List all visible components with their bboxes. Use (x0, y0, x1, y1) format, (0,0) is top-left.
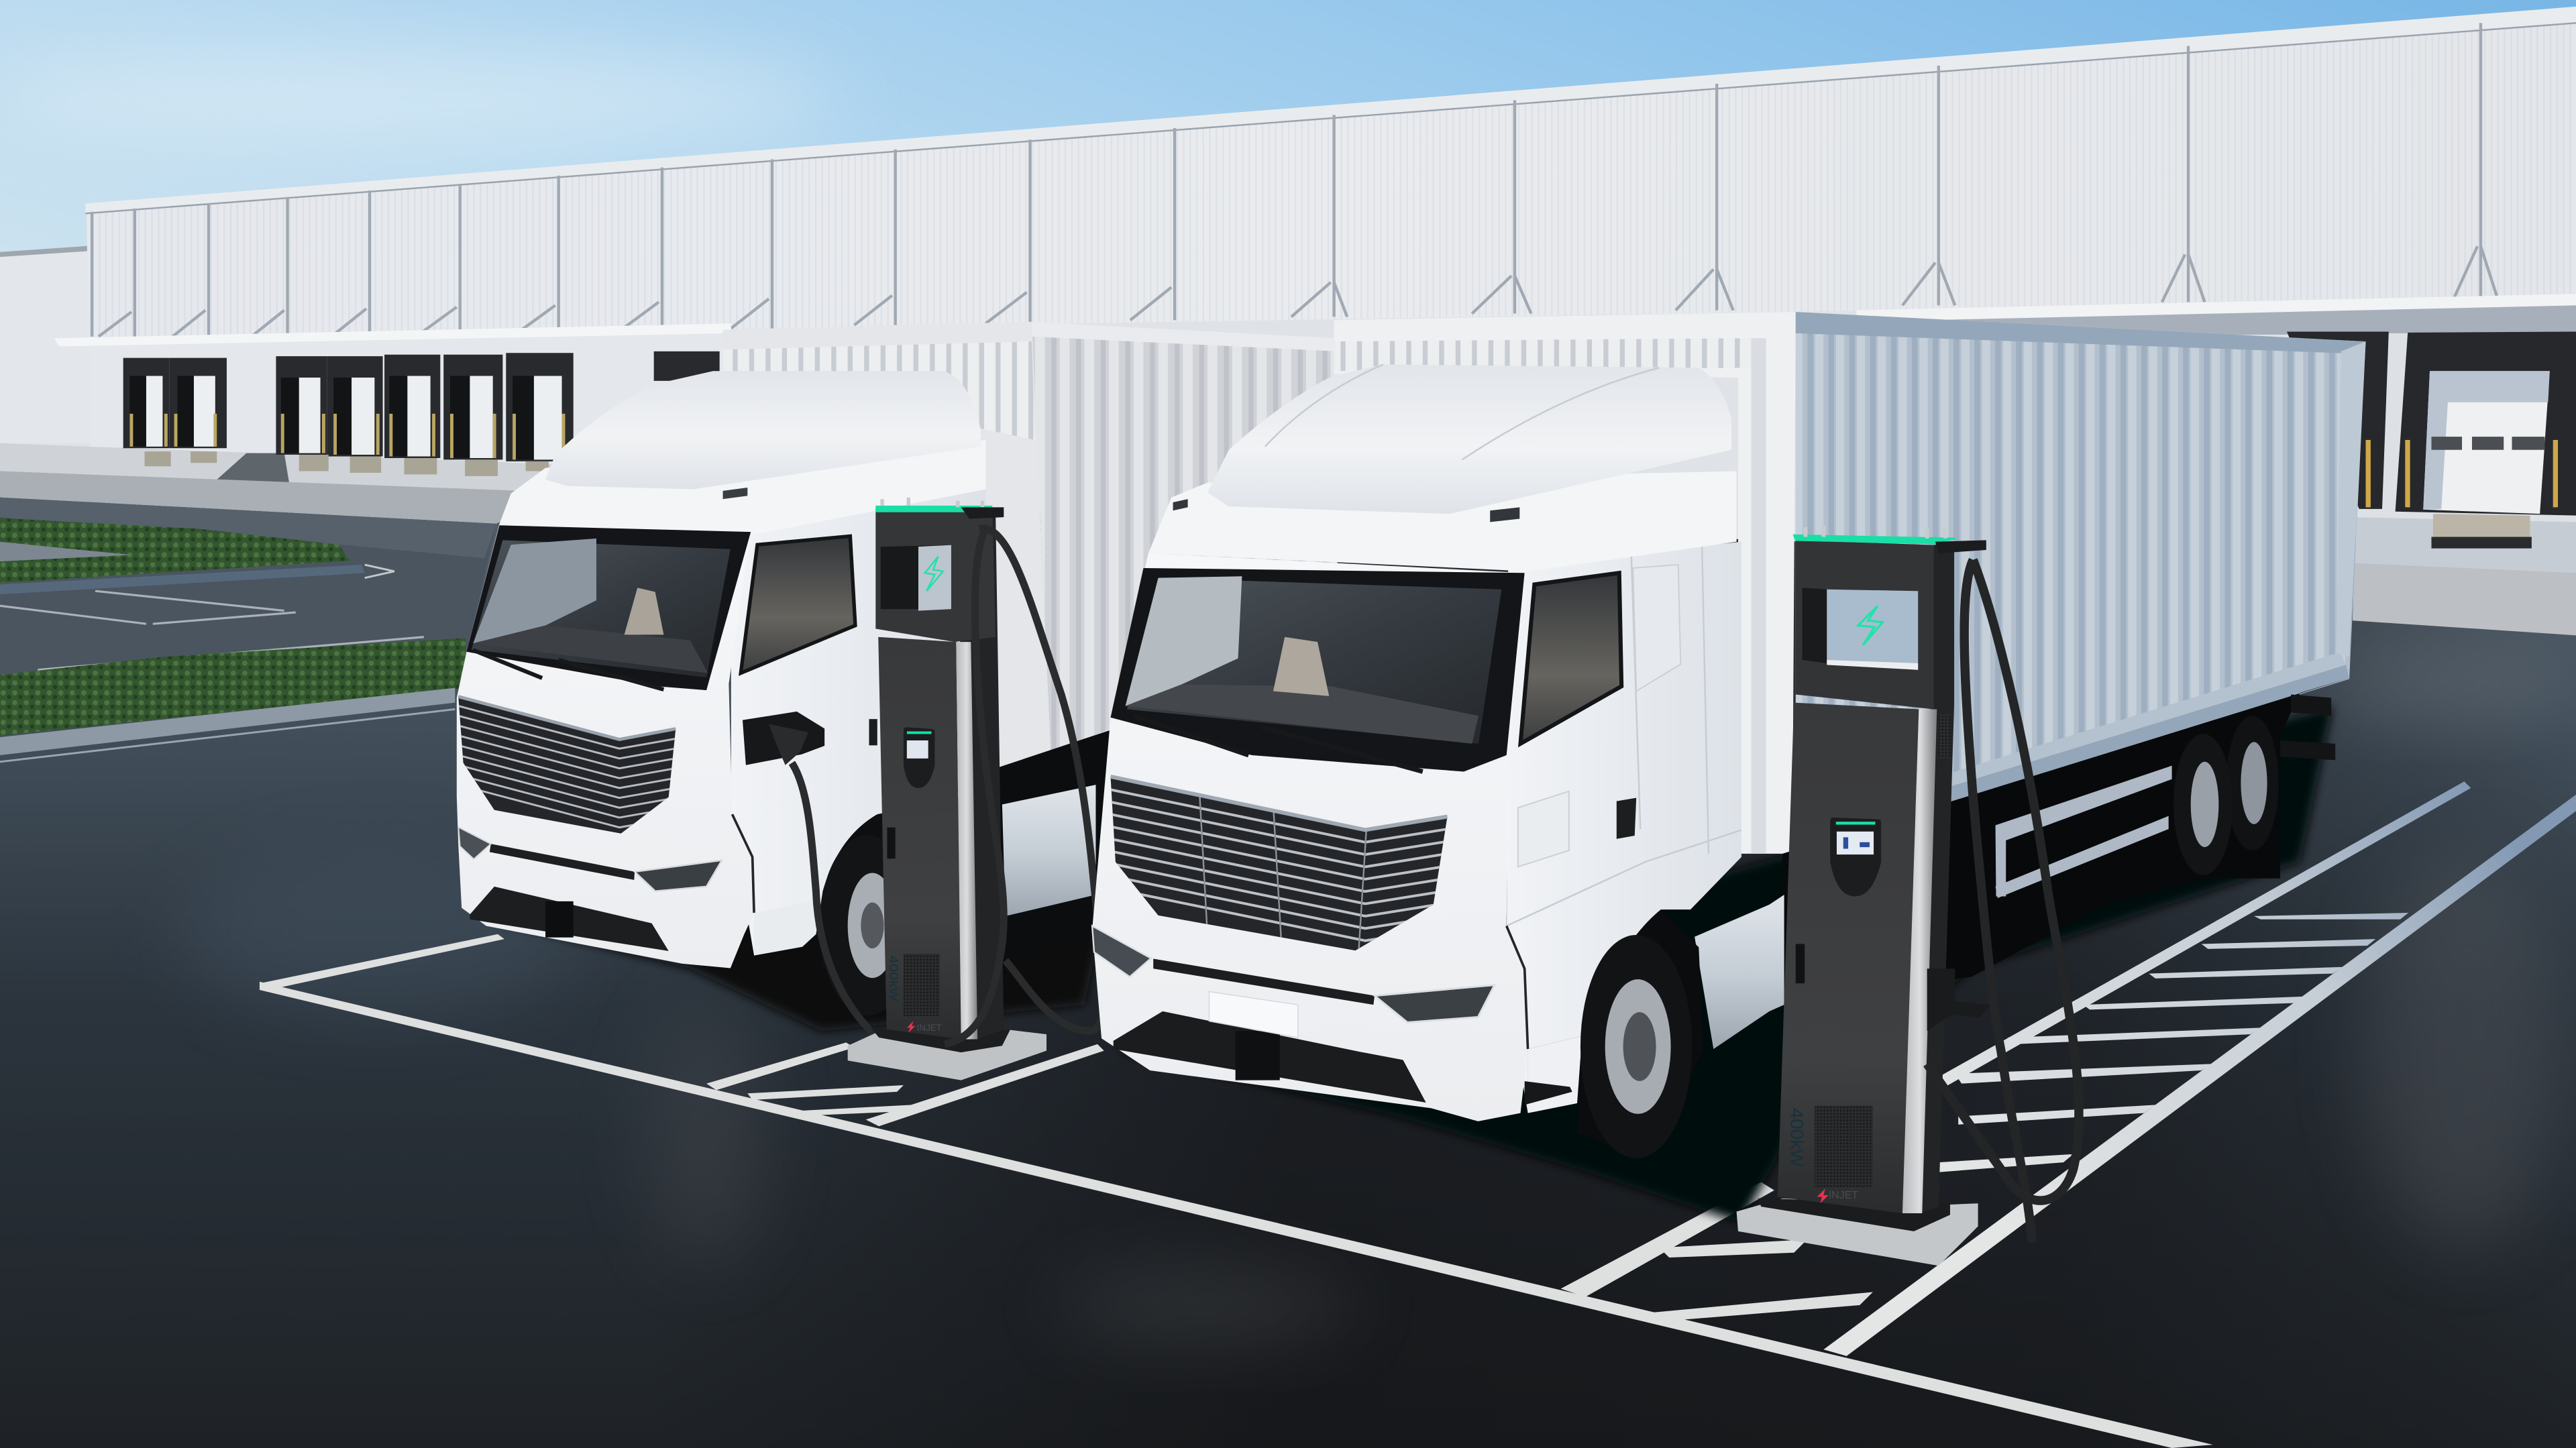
left end block (0, 246, 105, 443)
loading dock right (2287, 331, 2576, 549)
steel strip (956, 642, 977, 1039)
see-through window (881, 545, 951, 611)
plinth left (0, 443, 567, 492)
chassis (1782, 678, 2349, 1001)
wall backing (0, 299, 2576, 571)
body crease (733, 814, 754, 913)
door handle (1796, 944, 1805, 983)
brand logo: INJET (917, 1023, 942, 1033)
canopy right (1856, 294, 2576, 322)
stair wedge (215, 453, 289, 483)
power label: 400kW (887, 956, 901, 1002)
cab side (1507, 542, 1741, 1113)
cab front (1093, 553, 1528, 1121)
roof cap (1148, 471, 1737, 571)
trailer left: front face (723, 322, 1051, 791)
brand logo (907, 1021, 942, 1033)
side skirt (754, 899, 820, 956)
inner cable (945, 528, 1004, 1044)
rear bars (2280, 694, 2335, 760)
cable holder (1935, 540, 1986, 553)
lower wall right (2349, 333, 2576, 573)
hedge front (0, 638, 466, 762)
wheel arch (1577, 909, 1704, 1158)
fuel tank (1002, 785, 1095, 916)
truck right (1092, 312, 2366, 1158)
concrete base (1737, 1199, 1978, 1266)
green top light (875, 506, 992, 512)
head (1796, 540, 1933, 709)
side window (1521, 573, 1621, 744)
roof fairing (1208, 364, 1731, 514)
bumper intake (1114, 1011, 1426, 1103)
base plate (871, 1027, 1010, 1052)
brand logo (1817, 1188, 1858, 1203)
asphalt ground (0, 468, 2576, 1448)
steel strip (1902, 709, 1937, 1213)
back parking lot (0, 498, 496, 679)
roof fairing (545, 371, 981, 489)
rear wheels (2174, 716, 2279, 875)
trailer left: side (1032, 322, 1337, 767)
roof cap (499, 440, 985, 535)
charging connector on truck (743, 712, 824, 765)
side guard (1996, 766, 2172, 898)
cabinet front (1778, 703, 1919, 1213)
door handle (869, 719, 877, 745)
lower wall left (91, 329, 731, 483)
windshield (1111, 568, 1525, 771)
roof crease lines (1265, 364, 1659, 459)
parking lines (260, 781, 2576, 1448)
charger right (1737, 525, 2079, 1266)
dark band (1153, 959, 1375, 1005)
power label: 400kW (1787, 1108, 1807, 1167)
door handle (887, 828, 896, 858)
truck shadows on wet asphalt (493, 706, 2333, 1223)
outer cable (1927, 560, 2079, 1201)
trailer right: side (1796, 312, 2366, 850)
green top light (1794, 535, 1955, 543)
cab step (1525, 1081, 1572, 1105)
headlight (635, 860, 722, 891)
walkway left (0, 471, 567, 524)
chassis dark (985, 706, 1183, 968)
side (1921, 542, 1954, 1213)
bumper intake (470, 887, 669, 951)
upper wall with panels (85, 7, 2576, 340)
outer cable (979, 528, 1104, 1031)
cab front (457, 524, 754, 968)
front wheel (1580, 935, 1692, 1158)
fog light (458, 827, 491, 859)
wheel arch (821, 814, 920, 985)
side vent (1939, 714, 1950, 759)
cable holder (961, 507, 1004, 519)
front wheel (820, 835, 915, 1015)
HMI panel (904, 727, 934, 788)
corrugated band right (1856, 305, 2576, 337)
vent (1815, 1106, 1873, 1187)
loading docks left (123, 351, 720, 476)
see-through window (1803, 588, 1918, 670)
dark band (490, 844, 635, 880)
fog light (1092, 926, 1151, 977)
plate panel (1209, 991, 1298, 1038)
cable from truck (792, 763, 985, 1054)
fuel tank (1695, 895, 1784, 1049)
sky (0, 0, 2576, 525)
walkway right (2353, 563, 2576, 635)
inner cable (1964, 560, 2032, 1243)
windshield (467, 525, 751, 690)
holster (1927, 968, 1991, 1031)
vent (904, 954, 940, 1016)
roof sensors (1173, 499, 1519, 522)
trailer right: front face (1334, 312, 1796, 854)
headlight (1375, 985, 1495, 1023)
warehouse building (0, 7, 2576, 573)
side skirt (1528, 1036, 1582, 1113)
HMI panel (1830, 818, 1881, 897)
charger left (848, 498, 1104, 1080)
concrete base (848, 1027, 1046, 1080)
grille (458, 697, 676, 834)
truck left (457, 322, 1337, 1054)
lifting eyes (1805, 525, 1945, 539)
lifting eyes (882, 498, 982, 507)
door details (1507, 547, 1741, 926)
grille (1111, 777, 1448, 952)
body crease (1507, 926, 1528, 1049)
side (955, 512, 1004, 1039)
hedge back (0, 518, 394, 594)
head (875, 509, 996, 642)
cab side (731, 489, 985, 956)
base plate (1758, 1199, 1950, 1231)
cabinet front (878, 637, 961, 1039)
plinth right (2349, 517, 2576, 573)
brand logo: INJET (1829, 1190, 1858, 1201)
side window (741, 536, 855, 673)
canopy left (54, 323, 731, 346)
roof sensor (723, 488, 747, 499)
